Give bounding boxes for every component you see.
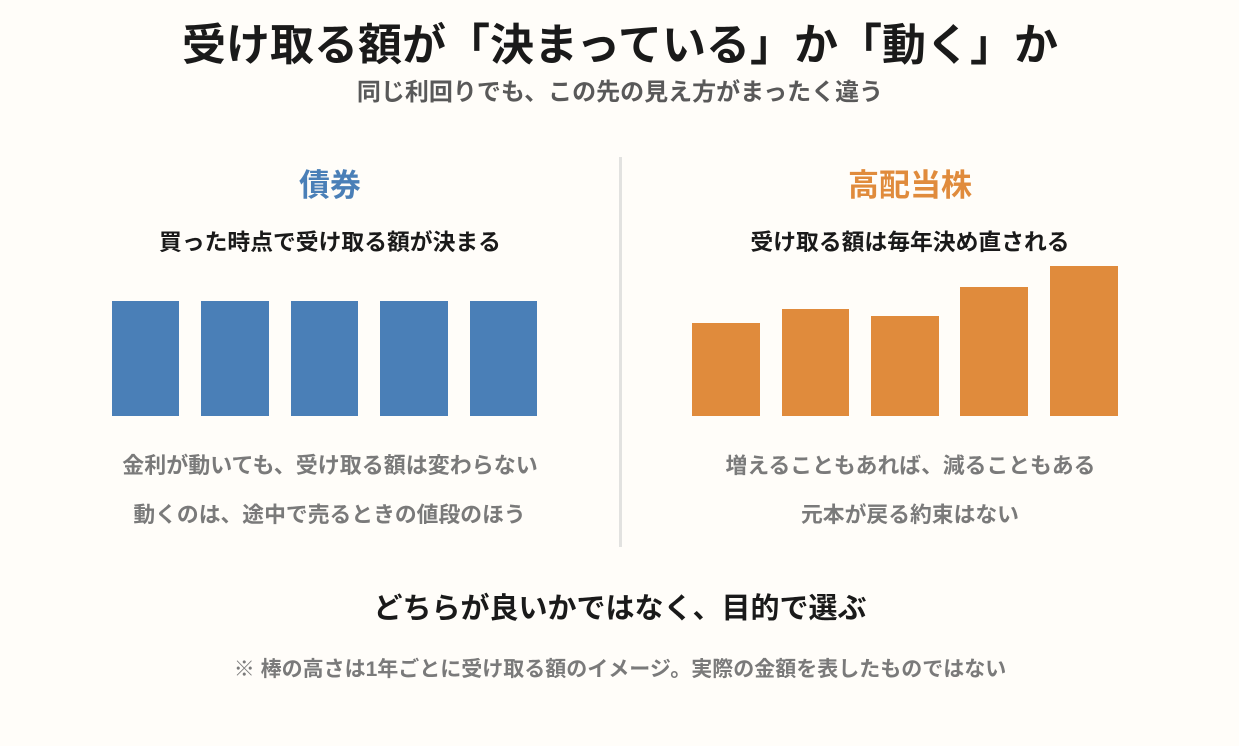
bonds note 2: 動くのは、途中で売るときの値段のほう: [133, 502, 526, 526]
conclusion: どちらが良いかではなく、目的で選ぶ: [373, 593, 867, 625]
bonds subheading: 買った時点で受け取る額が決まる: [159, 229, 501, 255]
subtitle: 同じ利回りでも、この先の見え方がまったく違う: [357, 79, 883, 106]
stocks subheading: 受け取る額は毎年決め直される: [750, 229, 1070, 255]
stocks note 2: 元本が戻る約束はない: [801, 502, 1019, 526]
bar chart: stocks: [692, 266, 1118, 416]
footnote: ※ 棒の高さは1年ごとに受け取る額のイメージ。実際の金額を表したものではない: [234, 658, 1006, 681]
title: 受け取る額が「決まっている」か「動く」か: [182, 21, 1058, 70]
bonds heading: 債券: [299, 168, 361, 203]
center divider: [619, 157, 622, 547]
bar chart: bonds: [112, 301, 537, 416]
stocks heading: 高配当株: [848, 168, 972, 203]
stocks note 1: 増えることもあれば、減ることもある: [726, 452, 1095, 478]
panel: bonds: [112, 168, 538, 526]
bonds note 1: 金利が動いても、受け取る額は変わらない: [122, 452, 538, 478]
panel: high dividend stocks: [692, 168, 1118, 526]
